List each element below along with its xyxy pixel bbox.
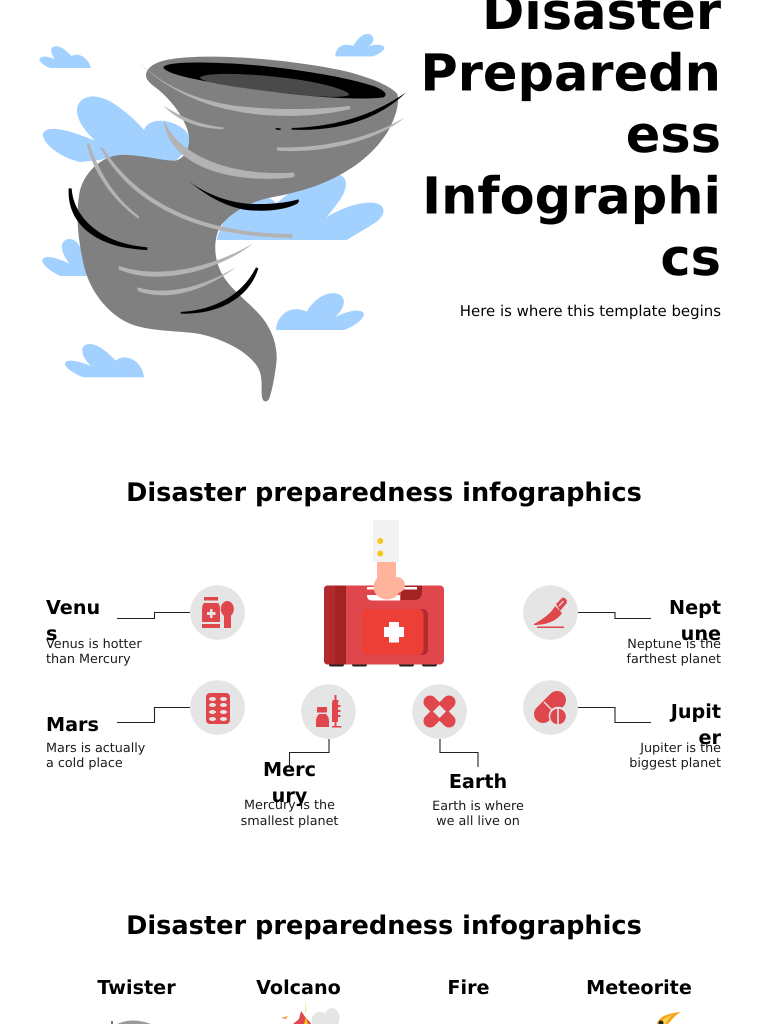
icon: crossed bandages [430,702,449,721]
item: Venus [46,585,245,667]
hand [377,562,396,582]
illustration: hand holding first aid kit [324,520,444,666]
section heading: preparedness: Disaster preparedness infographics [126,478,642,508]
item: Jupiter: biggest planet [629,756,721,771]
label: Meteorite: Meteorite [586,976,692,999]
item: Mercury [241,684,356,829]
item: Neptune: farthest planet [626,652,721,667]
label: Volcano [256,976,341,1024]
case handle [401,586,422,600]
icon: volcano eruption top [281,1003,340,1024]
illustration: tornado with clouds [39,34,406,401]
title: Preparedn [420,44,721,104]
label: Twister: Twister [97,976,176,999]
funnel opening [163,63,386,99]
subtitle: Here is where this template begins [460,302,721,320]
icon: capsule and tablet [543,700,567,725]
item: Mercury: Merc [263,758,316,781]
item: Venus: than Mercury [46,652,131,667]
funnel body [78,57,398,401]
icon: vial and syringe [316,695,342,728]
item: Mars: a cold place [46,756,123,771]
icon: scalpel [534,598,567,628]
item: Earth: Earth is where [432,799,524,814]
title: cs [660,229,721,288]
item: Neptune [523,585,721,667]
item: Mercury: smallest planet [241,814,338,829]
icon: meteorite flame [657,1012,681,1024]
light wind streaks [87,63,405,295]
item: Neptune: Neptune is the [627,637,721,652]
dark wind streaks [69,92,406,314]
item: Jupiter: Jupit [669,700,721,723]
case body [324,586,444,664]
sleeve [373,520,399,562]
item: Mercury: ury [272,784,308,807]
section heading: disasters: Disaster preparedness infographics [126,911,642,941]
item: Jupiter: er [699,726,722,749]
icon: medicine bottle and spoon [202,597,234,628]
item: Earth: we all live on [436,814,520,829]
item: Neptune: une [681,622,721,645]
icon: small twister [111,1020,151,1024]
case feet [329,662,437,666]
label: Volcano: Volcano [256,976,341,999]
item: Venus: s [46,622,57,645]
title: Infographi [422,168,721,226]
item: Neptune: Nept [669,596,721,619]
title [420,0,721,288]
clouds [39,34,385,377]
item: Venus: Venu [46,596,100,619]
title: ess [626,106,721,165]
item: Venus: Venus is hotter [46,637,142,652]
item: Mars: Mars is actually [46,741,146,756]
icon: pill blister pack [206,693,230,724]
label: Fire: Fire [447,976,490,999]
item: Jupiter [523,680,722,771]
item: Earth [412,684,524,829]
case panel [366,609,428,655]
item: Jupiter: Jupiter is the [639,741,721,756]
item: Mars: Mars [46,713,99,736]
label: Twister [97,976,176,1024]
item: Earth: Earth [449,770,507,793]
item: Mercury: Mercury is the [244,798,335,813]
item: Mars [46,680,245,771]
label: Meteorite [586,976,692,1024]
